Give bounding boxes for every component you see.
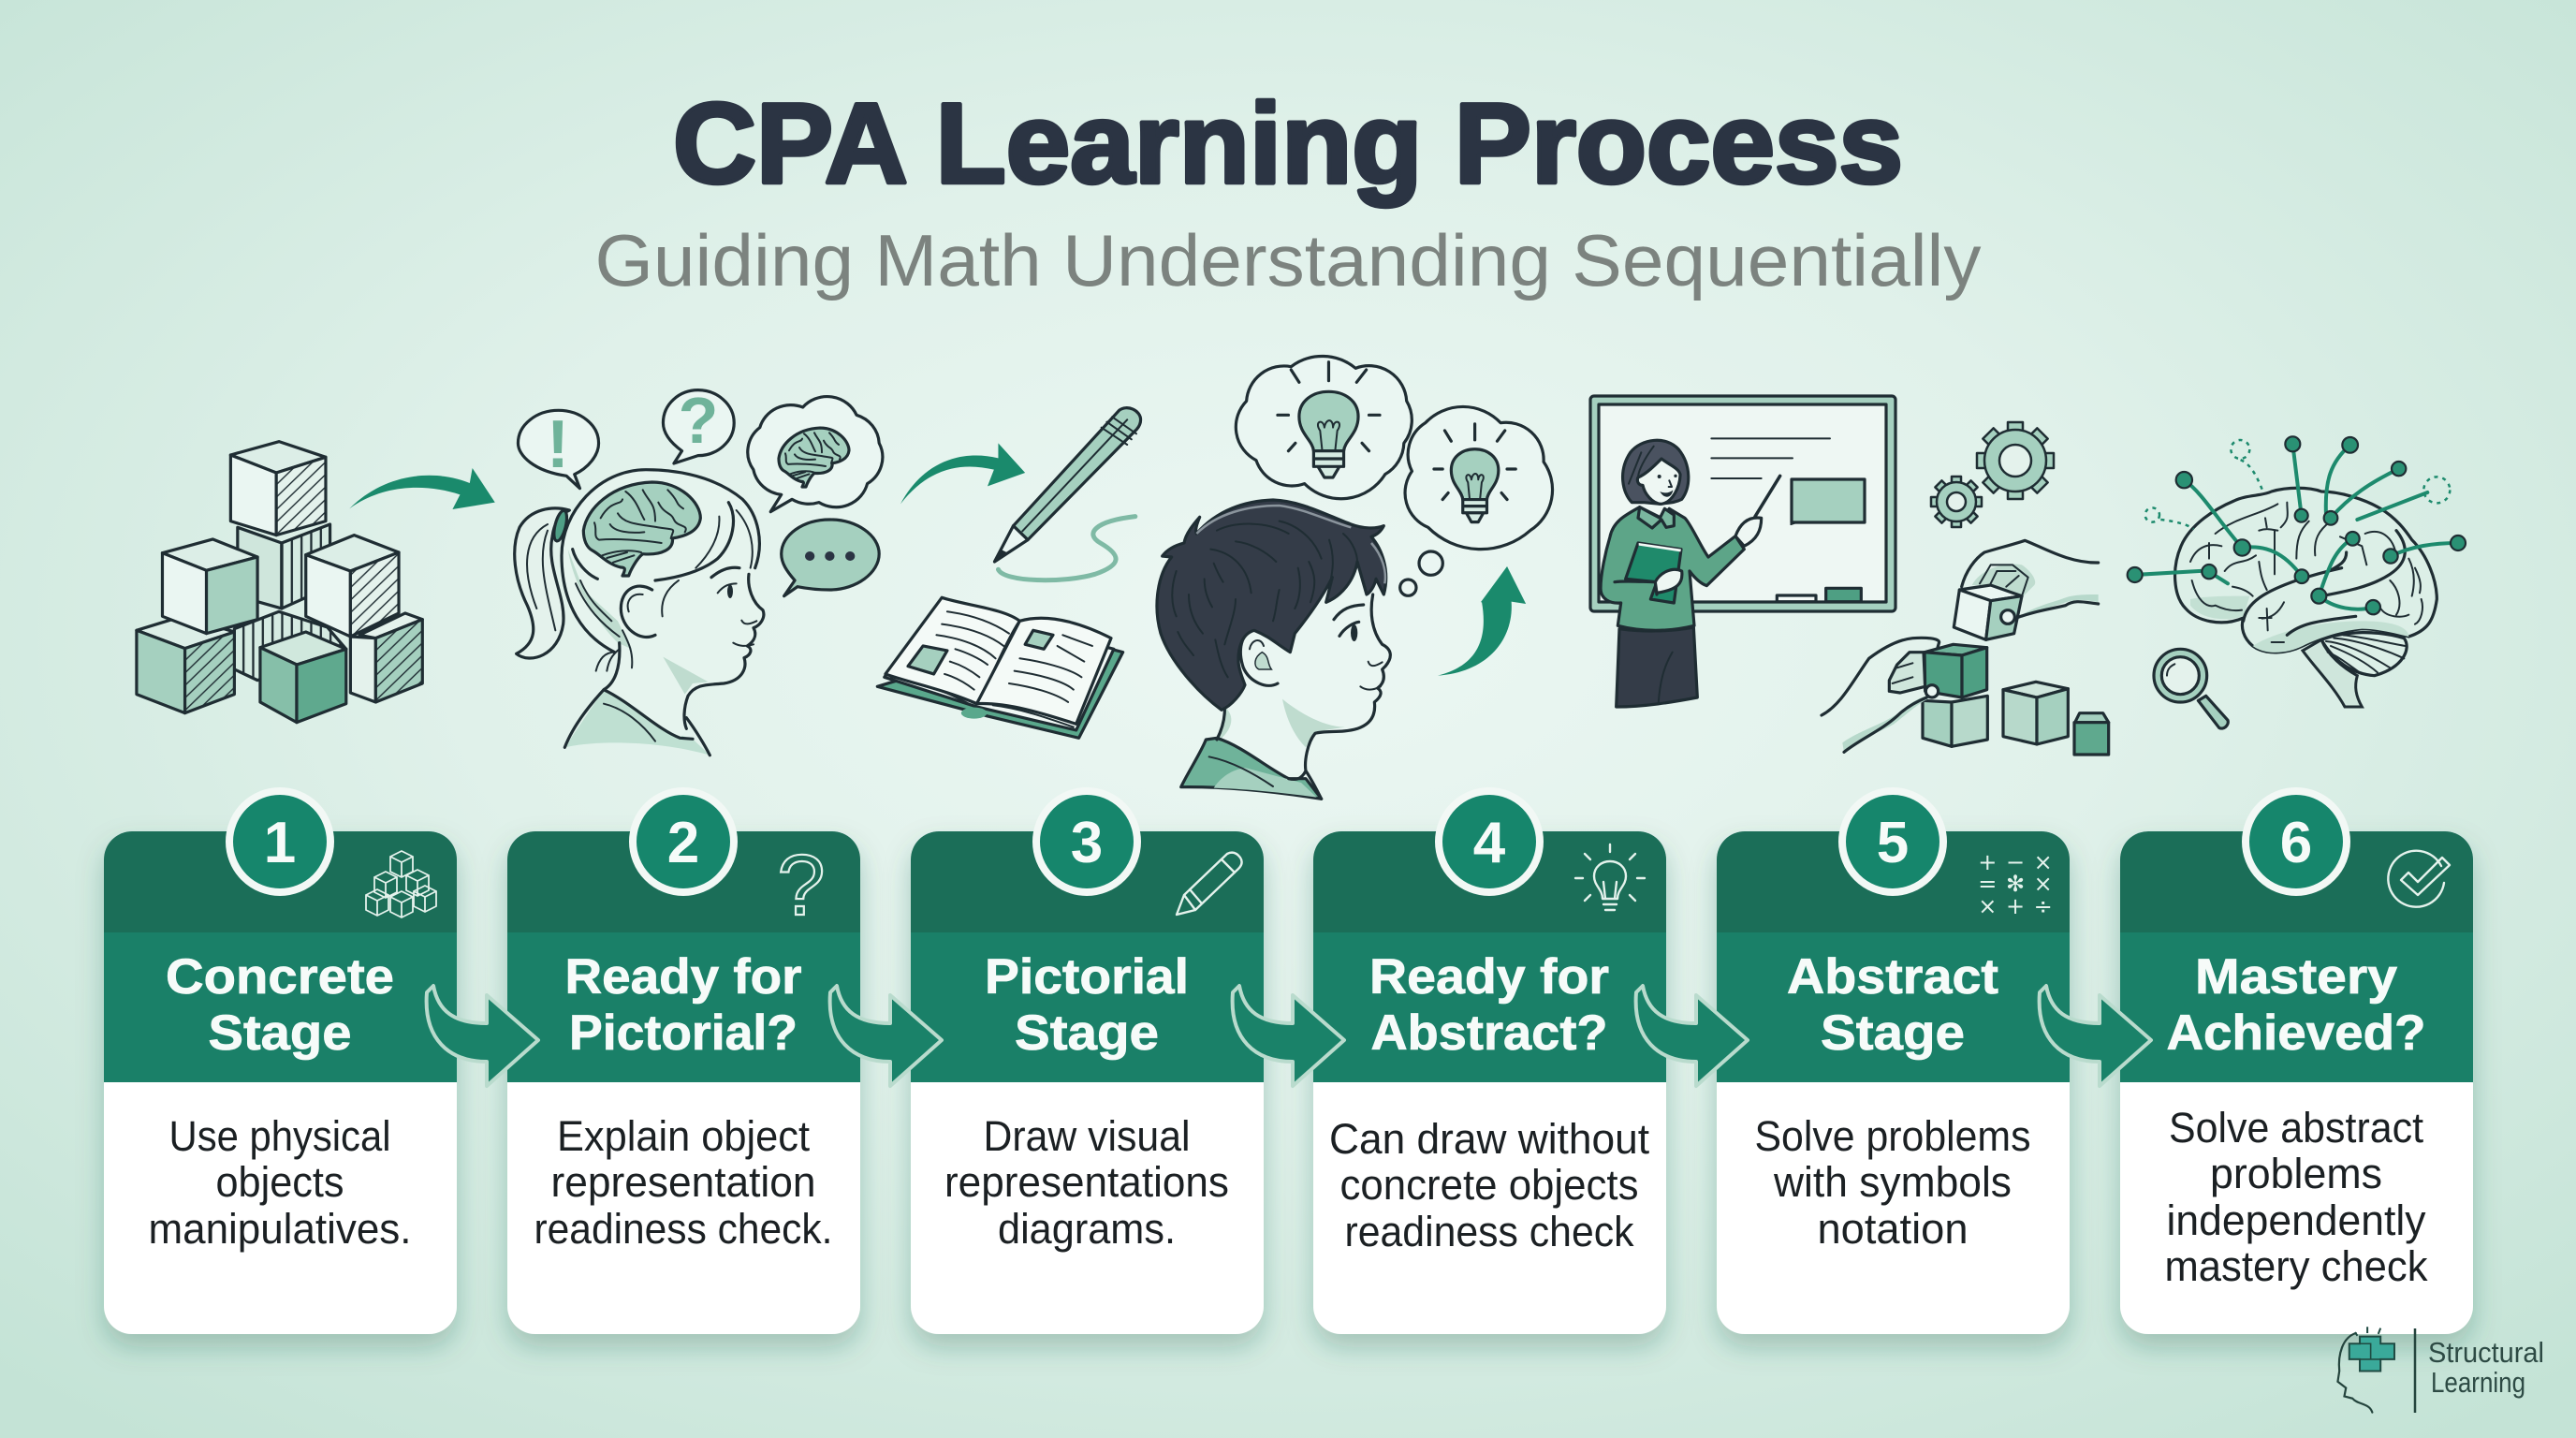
card 1: Concrete Stage: Concrete — [166, 949, 394, 1005]
card 6: Mastery Achieved?: independently — [2166, 1196, 2426, 1244]
card 3: Pictorial Stage: Pictorial — [985, 949, 1189, 1005]
arrow: card 4 to 5 — [1636, 986, 1748, 1086]
card 1: Concrete Stage: objects — [215, 1158, 344, 1206]
card 3: Pictorial Stage: Stage — [1015, 1005, 1159, 1061]
card 4: Ready for Abstract?: readiness check — [1344, 1208, 1634, 1255]
icon: pencil — [1177, 853, 1242, 915]
logo: Structural Learning — [2337, 1327, 2544, 1413]
card 4: Ready for Abstract?: Can draw without — [1329, 1115, 1649, 1163]
icon: math symbols: × + ÷ — [1978, 893, 2053, 919]
arrow: card 5 to 6 — [2040, 986, 2151, 1086]
card 3: Pictorial Stage: Draw visual — [983, 1112, 1191, 1160]
logo: Structural Learning: Structural — [2428, 1336, 2544, 1369]
card 2: Ready for Pictorial? — [507, 791, 860, 1334]
icon: light bulb — [1575, 844, 1645, 910]
card 1: Concrete Stage: Stage — [208, 1005, 352, 1061]
card 4: Ready for Abstract? — [1313, 791, 1666, 1334]
illustration: brain with neural network — [2128, 436, 2466, 707]
card 2: Ready for Pictorial?: Pictorial? — [569, 1005, 798, 1061]
card 6: Mastery Achieved?: Solve abstract — [2169, 1104, 2423, 1152]
icon: math symbols — [1978, 849, 2053, 919]
card 4: Ready for Abstract?: concrete objects — [1340, 1161, 1638, 1209]
arrow: card 2 to 3 — [830, 986, 942, 1086]
card 6: Mastery Achieved?: mastery check — [2164, 1242, 2428, 1290]
illustration: teacher at whiteboard — [1590, 396, 1895, 707]
card 5: Abstract Stage: notation — [1818, 1205, 1968, 1253]
card 1: Concrete Stage — [104, 791, 457, 1334]
card 6: Mastery Achieved?: problems — [2210, 1150, 2382, 1197]
illustration: stacked blocks — [137, 442, 422, 723]
icon: cubes — [366, 851, 436, 917]
card 4: Ready for Abstract?: Ready for — [1369, 949, 1609, 1005]
card 6: Mastery Achieved?: 6 — [2280, 811, 2312, 875]
arrow: card 3 to 4 — [1233, 986, 1344, 1086]
card 5: Abstract Stage — [1717, 791, 2070, 1334]
icon: question mark: ? — [777, 838, 826, 933]
card 5: Abstract Stage: with symbols — [1773, 1158, 2012, 1206]
icon: question mark: ? — [679, 384, 718, 457]
arrow: girl to pencil — [900, 443, 1025, 504]
illustration: open book — [877, 597, 1123, 738]
illustration: girl with brain and speech bubbles — [515, 390, 883, 756]
card 6: Mastery Achieved?: Mastery — [2195, 949, 2398, 1005]
icon: math symbols: = ✻ × — [1978, 871, 2053, 897]
card 5: Abstract Stage: 5 — [1877, 811, 1909, 875]
icon: exclamation mark: ! — [547, 407, 569, 482]
illustration: magnifying glass — [2154, 649, 2228, 728]
card 5: Abstract Stage: Abstract — [1787, 949, 1998, 1005]
card 6: Mastery Achieved? — [2120, 791, 2473, 1334]
illustration: boy thinking — [1157, 356, 1553, 799]
card 5: Abstract Stage: Stage — [1821, 1005, 1965, 1061]
card 1: Concrete Stage: manipulatives. — [148, 1205, 412, 1253]
arrow: card 1 to 2 — [427, 986, 538, 1086]
card 2: Ready for Pictorial?: Explain object — [557, 1112, 810, 1160]
arrow: boy to teacher — [1438, 566, 1526, 676]
card 3: Pictorial Stage — [911, 791, 1264, 1334]
card 4: Ready for Abstract?: 4 — [1473, 811, 1506, 875]
card 2: Ready for Pictorial?: readiness check. — [534, 1205, 833, 1253]
subtitle: Guiding Math Understanding Sequentially — [595, 219, 1981, 301]
arrow: blocks to girl — [349, 468, 495, 509]
illustration: gears — [1931, 422, 2054, 527]
card 4: Ready for Abstract?: Abstract? — [1370, 1005, 1608, 1061]
icon: math symbols: + − × — [1978, 849, 2053, 875]
card 3: Pictorial Stage: representations — [944, 1158, 1229, 1206]
illustration: pencil and squiggle — [994, 408, 1141, 580]
card 2: Ready for Pictorial?: Ready for — [565, 949, 801, 1005]
card 3: Pictorial Stage: diagrams. — [998, 1205, 1176, 1253]
card 2: Ready for Pictorial?: representation — [550, 1158, 816, 1206]
card 1: Concrete Stage: 1 — [264, 811, 296, 875]
icon: check mark — [2388, 851, 2450, 907]
title: CPA Learning Process — [673, 80, 1903, 207]
card 6: Mastery Achieved?: Achieved? — [2166, 1005, 2426, 1061]
card 2: Ready for Pictorial?: 2 — [667, 811, 699, 875]
card 5: Abstract Stage: Solve problems — [1754, 1112, 2031, 1160]
card 1: Concrete Stage: Use physical — [168, 1112, 391, 1160]
logo: Structural Learning: Learning — [2431, 1366, 2525, 1399]
illustration: hands placing blocks — [1822, 540, 2109, 755]
card 3: Pictorial Stage: 3 — [1071, 811, 1103, 875]
